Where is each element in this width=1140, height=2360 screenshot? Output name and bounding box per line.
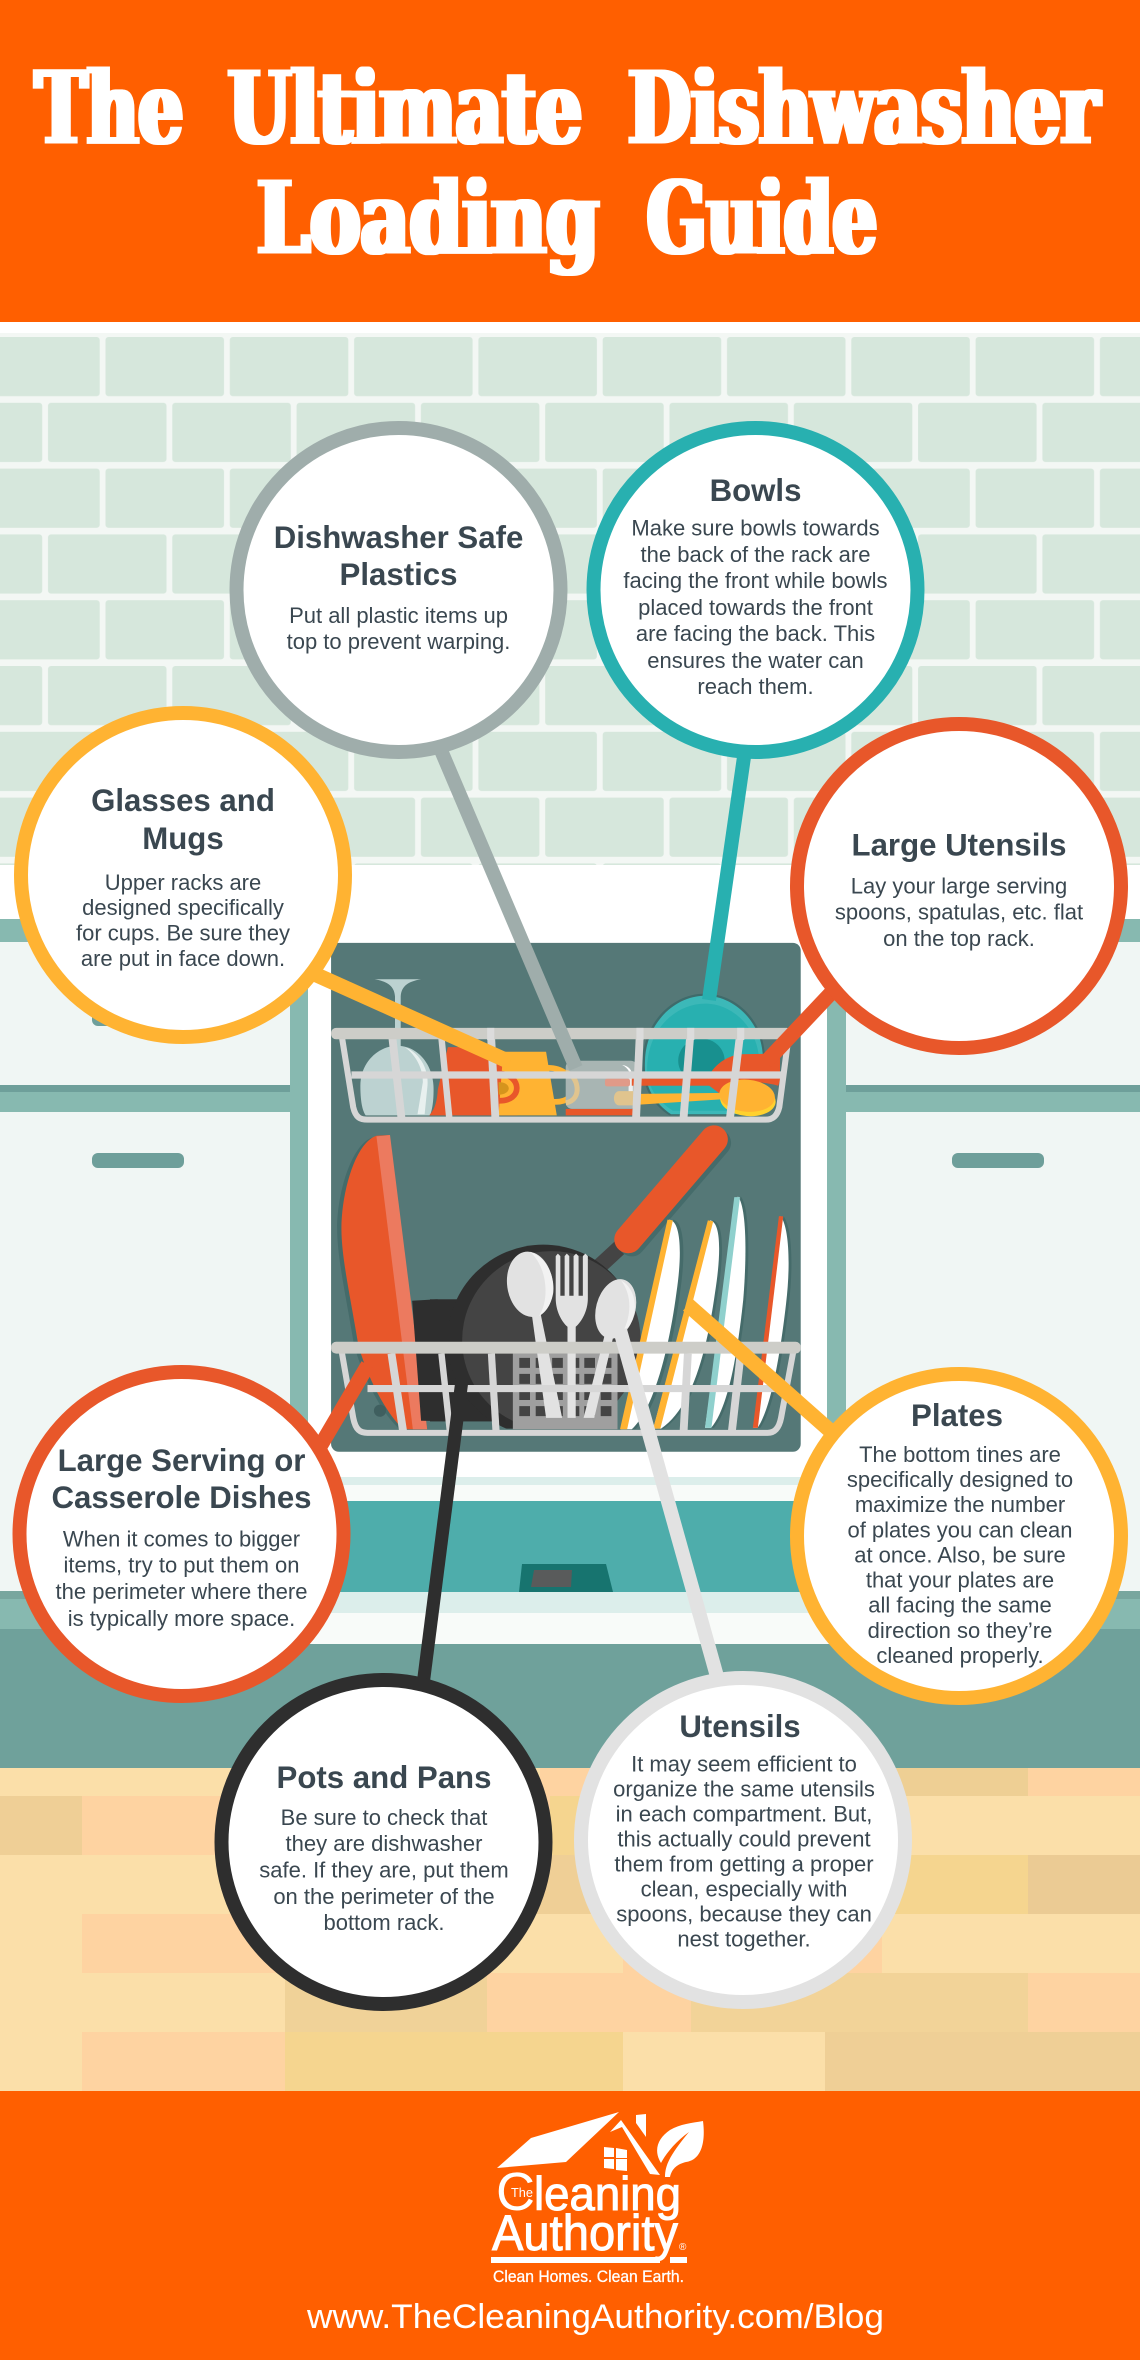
callout: bowls: the back of the rack are (641, 542, 870, 567)
wood floor (0, 1768, 1140, 2091)
callout: glasses and mugs: designed specifically (82, 895, 284, 920)
leader line: large utensils (766, 992, 832, 1062)
callout: dishwasher safe plastics (236, 428, 560, 752)
logo: The Cleaning Authority: The (511, 2185, 533, 2200)
fork (556, 1254, 588, 1418)
callout: plates: cleaned properly. (876, 1643, 1044, 1668)
title: Loading (257, 159, 599, 277)
callout: utensils: spoons, because they can (616, 1902, 872, 1926)
dishwasher door handle (519, 1564, 613, 1592)
leader line: utensils (620, 1330, 718, 1680)
cutlery basket (513, 1354, 617, 1429)
spoon (503, 1249, 562, 1418)
callout: large utensils: Large Utensils (852, 828, 1066, 862)
leader line: pots (423, 1380, 462, 1685)
dishwasher body (290, 865, 846, 1644)
callout: glasses and mugs: are put in face down. (81, 946, 285, 971)
callout: bowls: reach them. (697, 674, 814, 699)
callout: dishwasher safe plastics: Put all plastic items up (289, 603, 508, 628)
logo: The Cleaning Authority: Clean Homes. Clean Earth. (493, 2267, 684, 2286)
pot (374, 1299, 494, 1421)
callout: plates: specifically designed to (847, 1467, 1073, 1492)
callout: large serving or casserole dishes: Large Serving or (58, 1443, 305, 1478)
callout: bowls (594, 428, 918, 752)
footer banner (0, 2091, 1140, 2360)
callout: glasses and mugs: Upper racks are (105, 870, 261, 895)
callout: dishwasher safe plastics: Plastics (340, 557, 457, 592)
callout: large serving or casserole dishes: is typically more space. (68, 1606, 295, 1631)
callout: utensils (581, 1678, 905, 2002)
callout: plates: of plates you can clean (847, 1518, 1073, 1542)
title: The (35, 49, 183, 167)
leader line: glasses (310, 972, 510, 1062)
logo: The Cleaning Authority: Authority (492, 2205, 678, 2261)
header banner (0, 0, 1140, 322)
callout: utensils: It may seem efficient to (631, 1752, 857, 1776)
callout: pots and pans: bottom rack. (323, 1910, 445, 1935)
logo: The Cleaning Authority: leaning (534, 2167, 681, 2220)
wine glass (360, 979, 434, 1115)
website url: www.TheCleaningAuthority.com/Blog (306, 2298, 884, 2336)
callout: bowls: ensures the water can (647, 648, 864, 673)
leader line: bowls (709, 750, 745, 1000)
callout: glasses and mugs (21, 713, 345, 1037)
callout: large serving or casserole dishes: items, try to put them on (64, 1552, 299, 1578)
callout: pots and pans: safe. If they are, put them (259, 1858, 509, 1882)
callout: utensils: in each compartment. But, (616, 1802, 872, 1826)
callout: pots and pans: Be sure to check that (281, 1805, 487, 1830)
yellow mug (499, 1052, 573, 1115)
logo: The Cleaning Authority: ® (679, 2242, 687, 2253)
callout: utensils: clean, especially with (641, 1876, 847, 1902)
callout: pots and pans: they are dishwasher (286, 1831, 482, 1856)
callout: glasses and mugs: for cups. Be sure they (76, 920, 290, 946)
callout: plates: at once. Also, be sure (854, 1542, 1066, 1568)
callout: glasses and mugs: Mugs (142, 821, 224, 856)
callout: bowls: Bowls (710, 473, 801, 508)
upper rack (331, 1028, 792, 1120)
lower rack (331, 1342, 801, 1433)
callout: pots and pans (222, 1680, 546, 2004)
callout: utensils: organize the same utensils (613, 1776, 875, 1802)
callout: dishwasher safe plastics: Dishwasher Safe (274, 520, 523, 555)
callout: bowls: placed towards the front (638, 595, 873, 620)
callout: large serving or casserole dishes: Casserole Dishes (51, 1480, 312, 1515)
callout: bowls: facing the front while bowls (623, 568, 888, 593)
kitchen tile wall (0, 322, 1140, 925)
callout: plates: The bottom tines are (859, 1442, 1061, 1467)
callout: large serving or casserole dishes: the perimeter where there (56, 1579, 307, 1604)
callout: pots and pans: Pots and Pans (277, 1760, 491, 1795)
leader line: plates (688, 1305, 835, 1435)
callout: bowls: Make sure bowls towards (631, 516, 880, 540)
serving dish (337, 1135, 427, 1429)
callout: utensils: them from getting a proper (614, 1852, 874, 1876)
callout: plates (797, 1374, 1121, 1698)
callout: large utensils: on the top rack. (883, 926, 1035, 951)
bowl (642, 994, 765, 1115)
spatula (632, 1054, 780, 1095)
icon: house roof (497, 2112, 660, 2175)
ladle spoon (614, 1077, 777, 1118)
title: Guide (647, 159, 877, 277)
callout: large utensils (797, 724, 1121, 1048)
kitchen cabinets (0, 919, 1140, 1592)
leader line: plastics (440, 748, 576, 1068)
callout: pots and pans: on the perimeter of the (273, 1884, 495, 1909)
callout: large serving or casserole dishes (20, 1372, 344, 1696)
logo: The Cleaning Authority: C (496, 2162, 535, 2222)
callout: glasses and mugs: Glasses and (91, 783, 275, 818)
icon: leaf (657, 2121, 704, 2177)
second spoon (584, 1275, 643, 1418)
dishwasher interior (331, 943, 801, 1452)
callout: plates: direction so they’re (868, 1618, 1052, 1643)
callout: plates: maximize the number (855, 1492, 1065, 1517)
countertop and base (0, 1591, 1140, 1768)
callout: dishwasher safe plastics: top to prevent warping. (287, 629, 510, 654)
callout: bowls: are facing the back. This (636, 621, 875, 646)
callout: plates: all facing the same (868, 1592, 1052, 1618)
plastic container (566, 1061, 637, 1115)
leader line: casserole (318, 1365, 368, 1450)
callout: large serving or casserole dishes: When it comes to bigger (63, 1526, 300, 1552)
callout: utensils: nest together. (677, 1926, 811, 1952)
callout: plates: Plates (911, 1398, 1003, 1433)
callout: large utensils: spoons, spatulas, etc. flat (835, 900, 1083, 924)
frying pan (447, 1139, 717, 1436)
callout: utensils: this actually could prevent (617, 1826, 871, 1852)
title (35, 49, 1100, 277)
orange mug (429, 1047, 517, 1115)
title: Ultimate (228, 49, 582, 167)
logo: The Cleaning Authority (491, 2112, 704, 2286)
callout: large utensils: Lay your large serving (851, 874, 1067, 898)
plates (620, 1196, 791, 1429)
callout: utensils: Utensils (679, 1709, 801, 1744)
callout: plates: that your plates are (866, 1568, 1054, 1592)
